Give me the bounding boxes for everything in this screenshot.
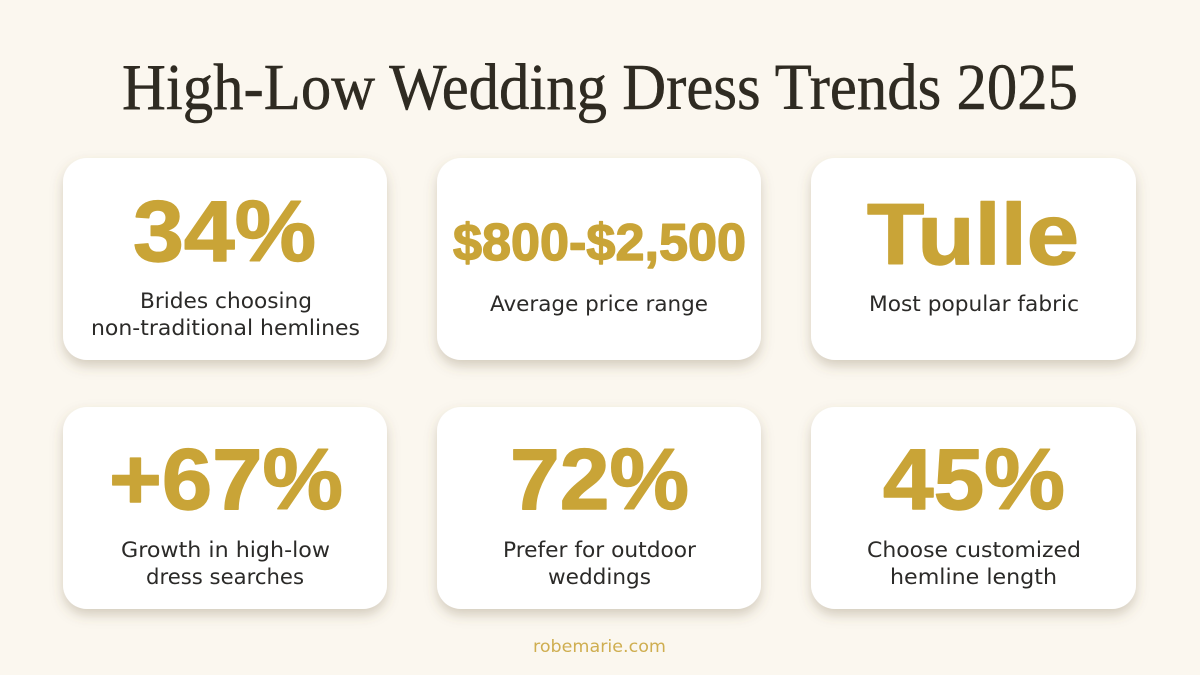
- panel: growth in searches: [63, 407, 387, 609]
- label: growth in high-low dress searches: [121, 538, 330, 590]
- label: choose customized hemline length: [867, 538, 1081, 590]
- stat: 72%: 72%: [510, 432, 689, 528]
- label: most popular fabric: Most popular fabric: [869, 292, 1079, 317]
- panel: average price range: [437, 158, 761, 360]
- label: brides choosing non-traditional hemlines: Brides choosing: [140, 289, 312, 314]
- label: growth in high-low dress searches: dress searches: [146, 565, 304, 590]
- label: choose customized hemline length: hemline length: [890, 565, 1057, 590]
- label: prefer for outdoor weddings: Prefer for outdoor: [503, 538, 696, 563]
- label: prefer for outdoor weddings: [503, 538, 696, 590]
- panel: brides choosing non-traditional hemlines: [63, 158, 387, 360]
- stat: 34%: 34%: [133, 184, 316, 280]
- stat: Tulle: Tulle: [867, 187, 1079, 283]
- label: brides choosing non-traditional hemlines: [91, 289, 360, 341]
- stat: 45%: 45%: [883, 432, 1065, 528]
- label: average price range: Average price range: [490, 292, 708, 317]
- title: High-Low Wedding Dress Trends 2025: [122, 51, 1078, 124]
- label: growth in high-low dress searches: Growth in high-low: [121, 538, 330, 563]
- footer: source site: robemarie.com: [533, 637, 666, 657]
- panel: customized hemline: [811, 407, 1136, 609]
- panel: most popular fabric: [811, 158, 1136, 360]
- label: choose customized hemline length: Choose customized: [867, 538, 1081, 563]
- label: brides choosing non-traditional hemlines: non-traditional hemlines: [91, 316, 360, 341]
- stat: +67%: +67%: [109, 432, 343, 528]
- stat: price range: $800-$2,500: [453, 214, 746, 272]
- label: prefer for outdoor weddings: weddings: [548, 565, 651, 590]
- panel: outdoor weddings: [437, 407, 761, 609]
